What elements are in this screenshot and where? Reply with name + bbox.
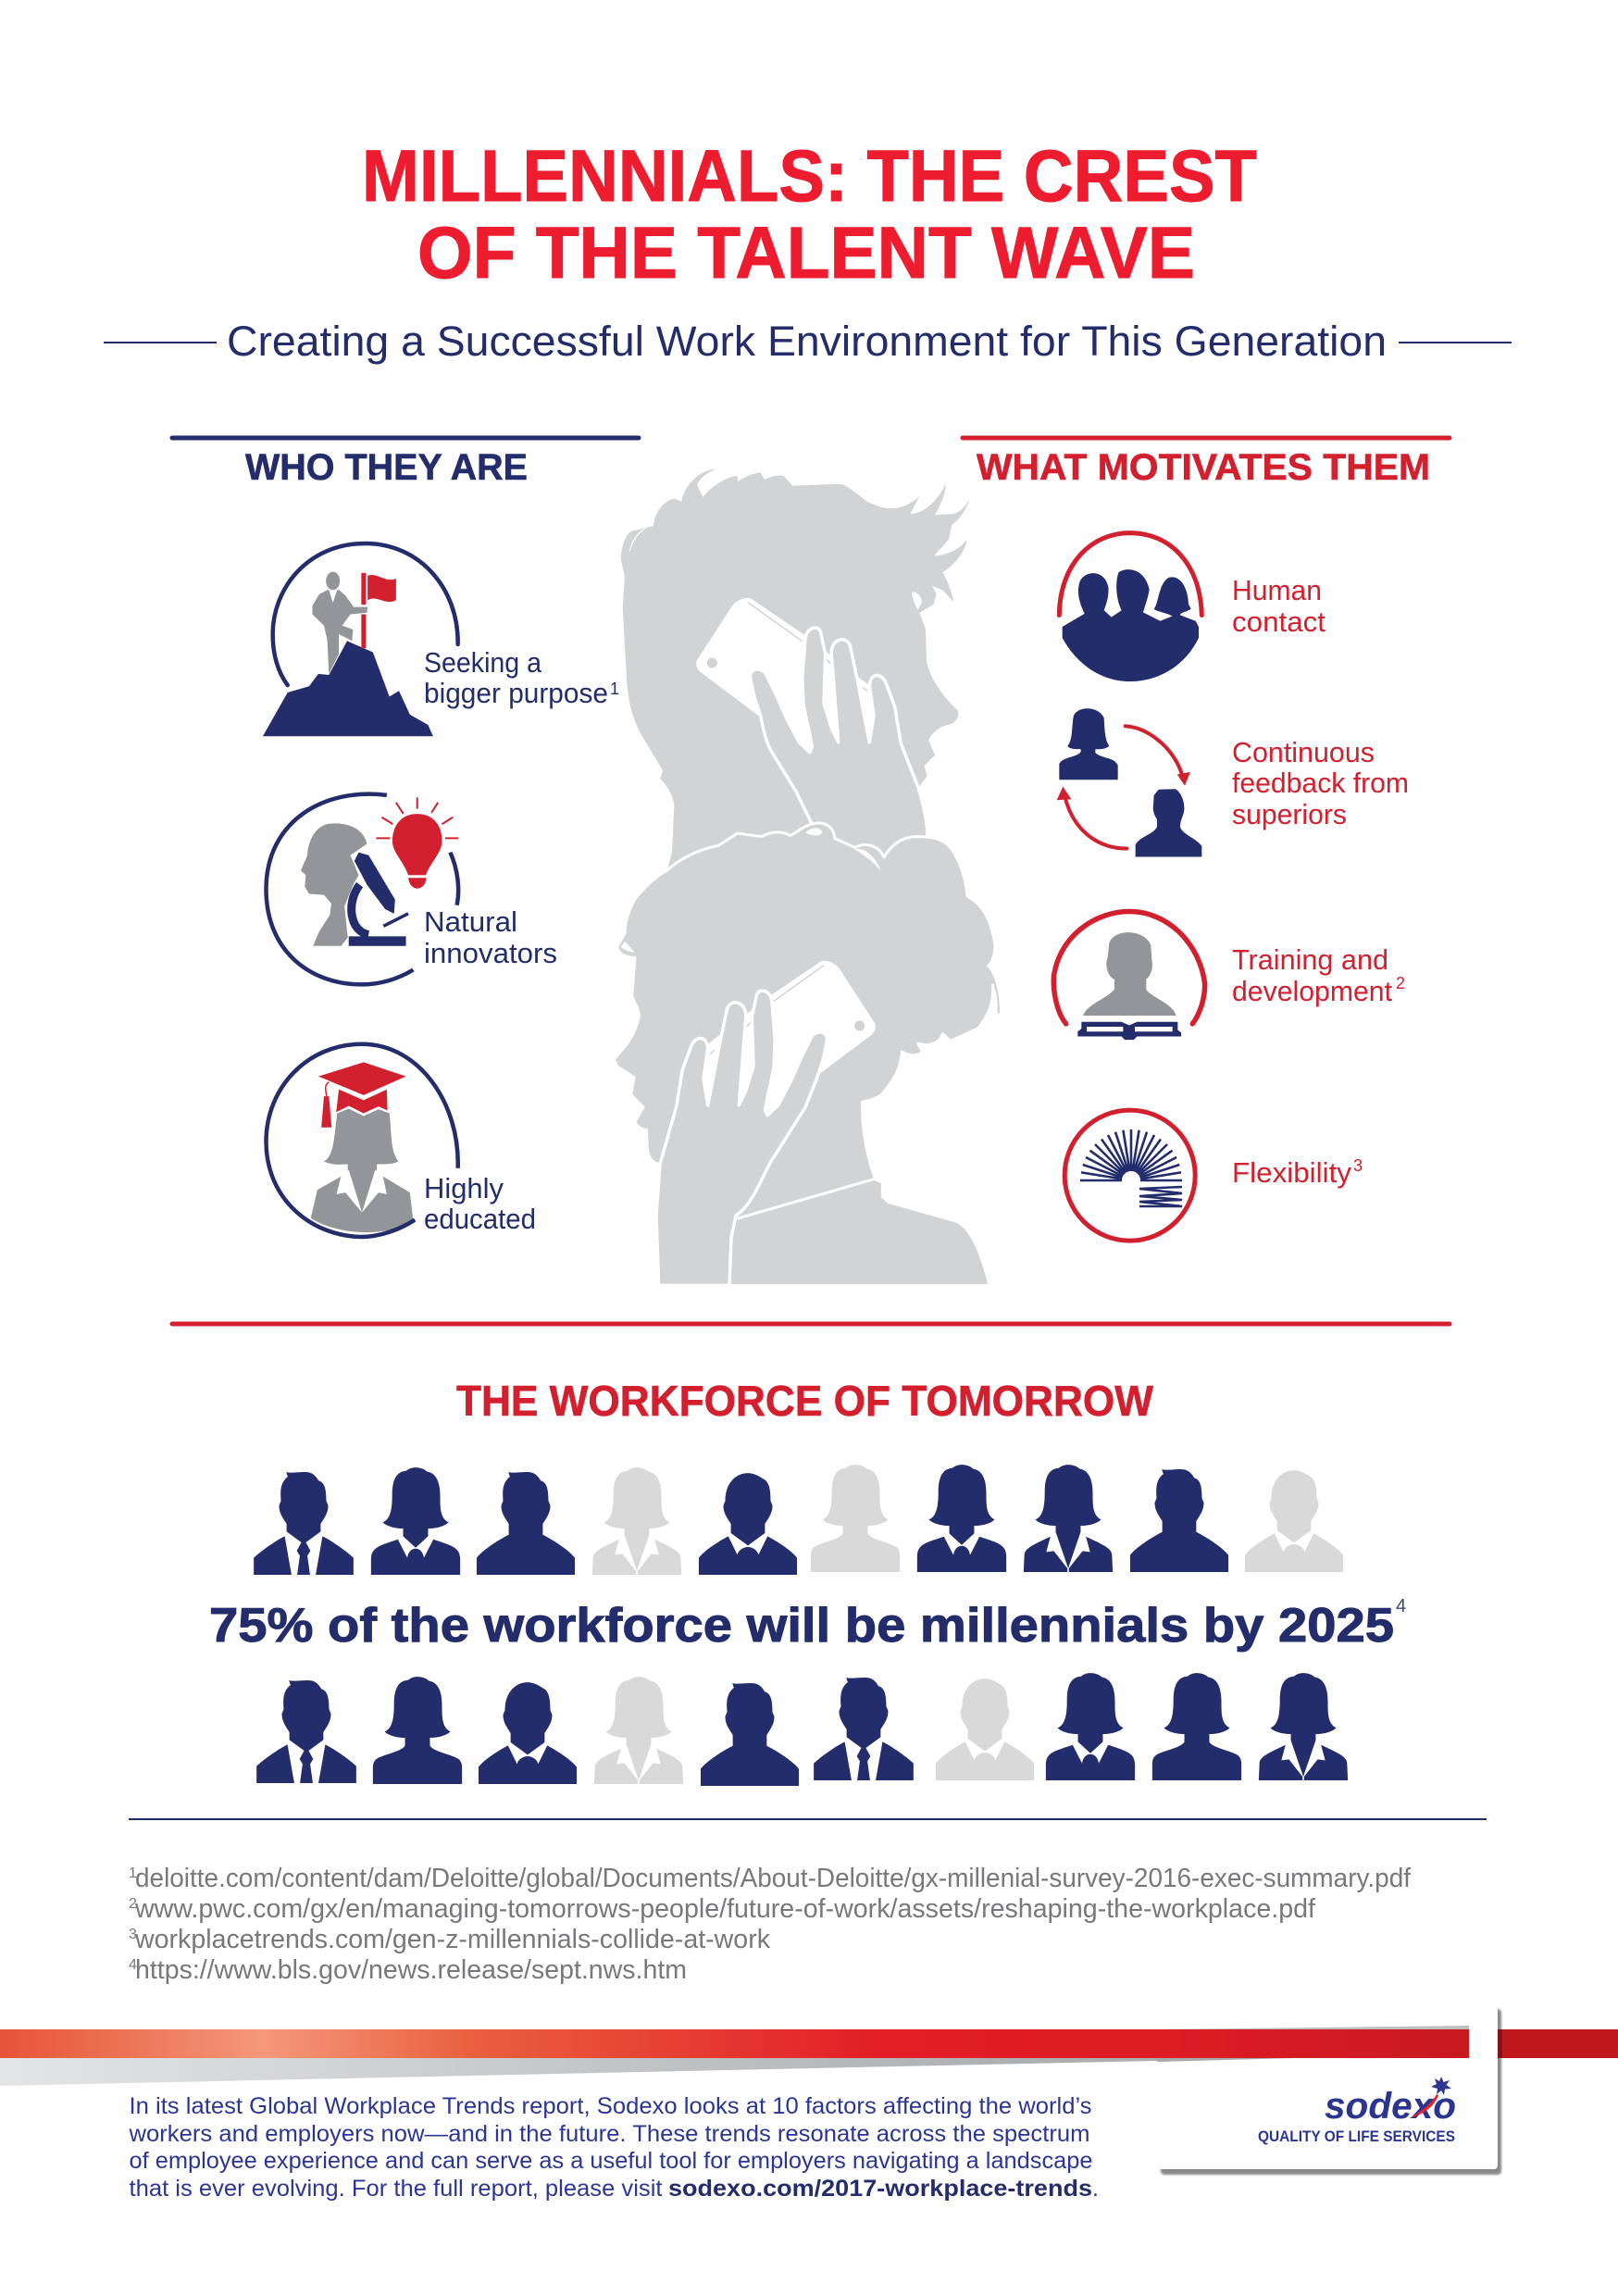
text: natural innovators: innovators [424, 937, 557, 969]
text: human contact: contact [1232, 605, 1326, 638]
footnotes: www.pwc.com/gx/en/managing-tomorrows-people/future-of-work/assets/reshaping-the-workplace.pdf [134, 1894, 1316, 1924]
man silhouette [621, 468, 969, 874]
text: seeking a bigger purpose [424, 646, 619, 709]
footnotes: 3 [129, 1927, 137, 1942]
woman hair highlights [621, 828, 998, 1015]
person 15 [701, 1683, 799, 1786]
person 19 [1152, 1673, 1241, 1780]
statistic: 75 percent of the workforce: 75% of the workforce will be millennials by 2025 [209, 1599, 1394, 1653]
text: human contact: Human [1232, 574, 1322, 606]
logo: sodexo [1258, 2077, 1456, 2145]
person 11 [256, 1680, 356, 1783]
person 4 [592, 1467, 681, 1575]
text: continuous feedback from superiors [1232, 736, 1409, 830]
woman phone [697, 961, 876, 1117]
woman phone details [710, 966, 865, 1054]
logo: sodexo: sodexo [1325, 2086, 1456, 2127]
footnotes: 1 [129, 1866, 137, 1881]
footer text: In its latest Global Workplace Trends report, Sodexo looks at 10 factors affecting the world’s [130, 2093, 1092, 2119]
person 9 [1130, 1469, 1228, 1572]
icon: continuous feedback cycle [1057, 708, 1201, 856]
panel: what motivates them [963, 438, 1450, 1241]
icon: human contact group [1059, 533, 1201, 681]
woman silhouette [614, 823, 1002, 1285]
footer text: sodexo.com/2017-workplace-trends [668, 2176, 1092, 2202]
text: human contact [1232, 574, 1326, 638]
footnotes [129, 1864, 1412, 1985]
icon: graduate [266, 1044, 458, 1237]
text: highly educated: educated [424, 1203, 536, 1235]
footnotes: https://www.bls.gov/news.release/sept.nws.htm [135, 1955, 687, 1985]
person 17 [936, 1678, 1034, 1780]
text: training and development: 2 [1396, 974, 1405, 992]
icon: mountain climber [263, 543, 458, 736]
icon: training book and reader [1053, 912, 1205, 1040]
person 5 [699, 1473, 797, 1575]
heading: who they are: WHO THEY ARE [245, 447, 528, 488]
text: training and development [1232, 943, 1405, 1007]
people row two [256, 1673, 1348, 1786]
man phone details [707, 603, 867, 692]
text: seeking a bigger purpose: bigger purpose [424, 677, 608, 709]
footer text: of employee experience and can serve as a useful tool for employers navigating a landscape [130, 2148, 1092, 2174]
subtitle with side rules: Creating a Successful Work Environment for This Generation [227, 318, 1387, 365]
footer text [128, 2093, 1099, 2202]
person 7 [917, 1465, 1006, 1572]
text: training and development: Training and [1232, 943, 1388, 976]
person 2 [371, 1467, 460, 1575]
footnotes: workplacetrends.com/gen-z-millennials-collide-at-work [134, 1925, 770, 1954]
title [362, 134, 1257, 293]
person 20 [1259, 1673, 1348, 1780]
text: flexibility: 3 [1353, 1156, 1363, 1175]
text: natural innovators: Natural [424, 905, 517, 938]
panel: who they are [172, 438, 639, 1237]
person 8 [1024, 1465, 1113, 1572]
woman hand [656, 991, 827, 1285]
footer text: . [1092, 2176, 1099, 2202]
text: continuous feedback from superiors: Continuous [1232, 736, 1375, 768]
person 18 [1046, 1673, 1135, 1780]
heading: what motivates them: WHAT MOTIVATES THEM [977, 447, 1430, 488]
text: continuous feedback from superiors: superiors [1232, 798, 1347, 830]
text: continuous feedback from superiors: feedback from [1232, 767, 1409, 799]
person 10 [1245, 1470, 1343, 1572]
title: MILLENNIALS: THE CREST [362, 134, 1257, 217]
person 14 [594, 1677, 683, 1784]
person 13 [479, 1682, 577, 1784]
logo: sodexo: QUALITY OF LIFE SERVICES [1258, 2128, 1455, 2145]
man hand [751, 628, 927, 880]
text: seeking a bigger purpose: 1 [610, 680, 619, 698]
statistic: 75 percent of the workforce: 4 [1396, 1596, 1406, 1616]
man phone [696, 598, 875, 755]
footer text: that is ever evolving. For the full report, please visit [130, 2176, 663, 2202]
footer text: workers and employers now—and in the future. These trends resonate across the spectrum [128, 2121, 1090, 2147]
text: highly educated: Highly [424, 1172, 504, 1204]
person 1 [254, 1472, 354, 1575]
footer band [0, 2007, 1618, 2175]
footnotes: 2 [129, 1896, 137, 1912]
text: flexibility: Flexibility [1232, 1156, 1352, 1189]
footnotes: deloitte.com/content/dam/Deloitte/global/Documents/About-Deloitte/gx-millenial-survey-2016-exec-summary.pdf [135, 1864, 1412, 1893]
text: natural innovators [424, 905, 557, 969]
illustration: two silhouettes on phones [614, 468, 1002, 1285]
people row one [254, 1465, 1343, 1575]
person 6 [811, 1465, 900, 1572]
woman collar line [738, 1179, 881, 1218]
footnotes: 4 [129, 1957, 137, 1973]
text: highly educated [424, 1172, 536, 1235]
title: OF THE TALENT WAVE [417, 211, 1195, 293]
person 16 [814, 1678, 914, 1780]
man hair highlight [629, 527, 922, 610]
text: training and development: development [1232, 975, 1392, 1007]
heading: the workforce of tomorrow: THE WORKFORCE OF TOMORROW [456, 1377, 1154, 1425]
icon: innovator with microscope and bulb [266, 794, 458, 984]
person 3 [477, 1472, 575, 1575]
person 12 [373, 1677, 462, 1784]
text: seeking a bigger purpose: Seeking a [424, 646, 542, 679]
icon: flexibility slinky [1064, 1110, 1195, 1241]
